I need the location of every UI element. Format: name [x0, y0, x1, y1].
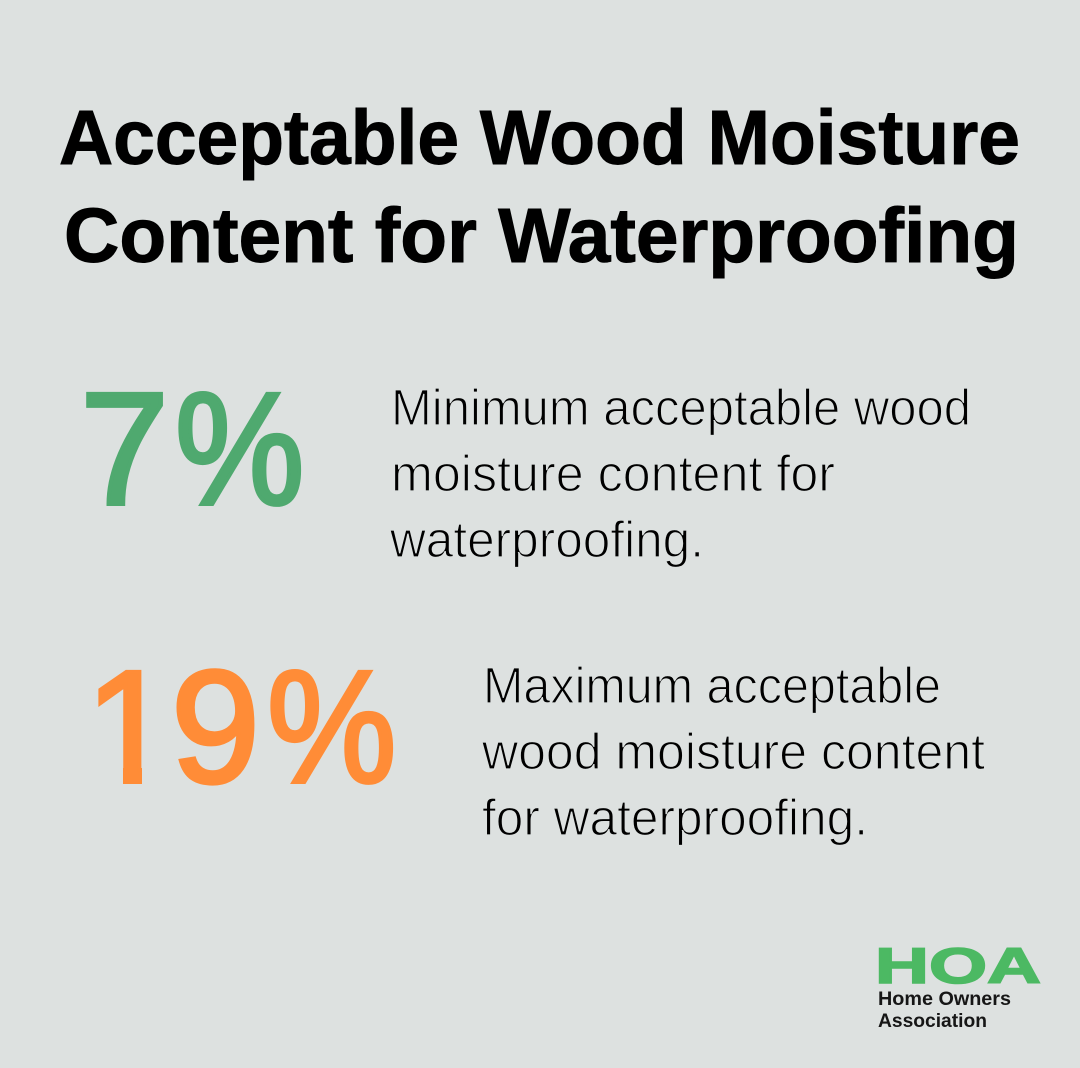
logo wordmark — [878, 989, 1011, 1032]
title — [59, 95, 1020, 279]
number: 19% — [85, 637, 396, 817]
statistic: minimum 7% — [80, 359, 971, 568]
number: 19%: 9 — [171, 637, 260, 816]
logo wordmark: Home Owners — [878, 989, 1011, 1010]
number: 19%: % — [267, 639, 396, 817]
description: minimum — [389, 379, 971, 568]
description: minimum: Minimum acceptable wood — [391, 379, 971, 436]
description: minimum: moisture content for — [391, 445, 835, 502]
logo mark: HOA: HOA — [875, 938, 1041, 994]
number: 7%: % — [175, 361, 304, 539]
title: Acceptable Wood Moisture — [59, 95, 1020, 181]
description: maximum — [481, 657, 985, 846]
title: Content for Waterproofing — [64, 193, 1019, 279]
number: 19%: 1 — [85, 637, 174, 816]
description: maximum: wood moisture content — [481, 723, 985, 780]
statistic: maximum 19% — [85, 637, 985, 846]
logo wordmark: Association — [878, 1011, 987, 1032]
description: maximum: Maximum acceptable — [483, 657, 941, 714]
number: 7% — [80, 359, 304, 539]
description: maximum: for waterproofing. — [482, 789, 868, 846]
logo: Home Owners Association — [875, 938, 1041, 1032]
number: 7%: 7 — [80, 359, 169, 538]
description: minimum: waterproofing. — [389, 511, 704, 568]
